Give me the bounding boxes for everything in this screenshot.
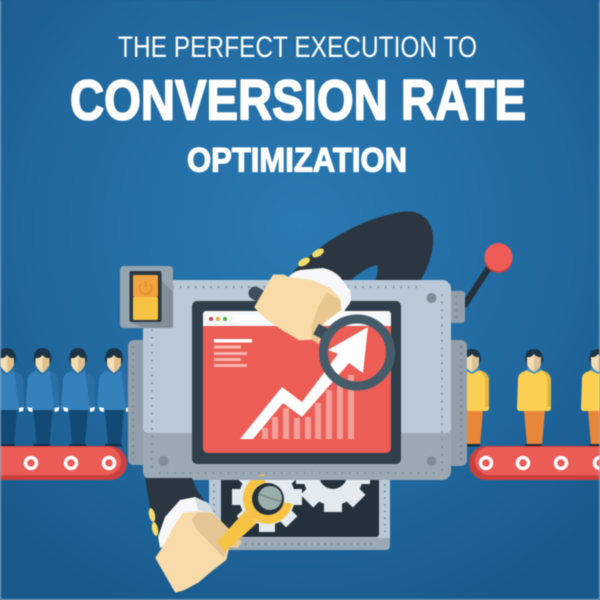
upper arm [285, 211, 433, 290]
gears [231, 479, 371, 533]
bolt [252, 483, 284, 515]
left conveyor belt [0, 446, 127, 480]
lower arm [145, 478, 215, 548]
right conveyor with yellow people [455, 349, 600, 480]
lower gear box [208, 479, 391, 551]
browser screen [192, 301, 401, 464]
title line 3: OPTIMIZATION [187, 142, 407, 180]
magnifier ring [324, 319, 390, 386]
machine body [143, 280, 451, 480]
upper hand with magnifier [255, 268, 390, 386]
upper sleeve buttons [297, 247, 325, 268]
text lines [214, 339, 252, 367]
yellow people [455, 349, 600, 446]
power icon [140, 281, 152, 294]
power switch [120, 266, 173, 328]
left conveyor with blue people [0, 348, 131, 480]
sleeve buttons [148, 508, 159, 536]
rear magnifier stub [255, 293, 272, 303]
trend arrow [240, 327, 368, 439]
screen frame [192, 301, 401, 464]
red page [203, 326, 391, 453]
cuff [287, 268, 351, 314]
right conveyor belt [469, 446, 600, 480]
title line 1: THE PERFECT EXECUTION TO [118, 31, 477, 64]
title [70, 31, 526, 180]
cuff [158, 497, 215, 548]
magnifier handle [316, 329, 329, 336]
hand back [157, 513, 240, 591]
lever [464, 243, 512, 306]
blue people [0, 348, 131, 446]
machine top edge over wrench [209, 476, 390, 480]
wrench [217, 478, 288, 552]
browser bar [203, 311, 391, 326]
lower hand and wrench [157, 478, 288, 591]
machine side panels [128, 291, 467, 466]
fist [256, 276, 340, 342]
bar chart [262, 375, 354, 439]
